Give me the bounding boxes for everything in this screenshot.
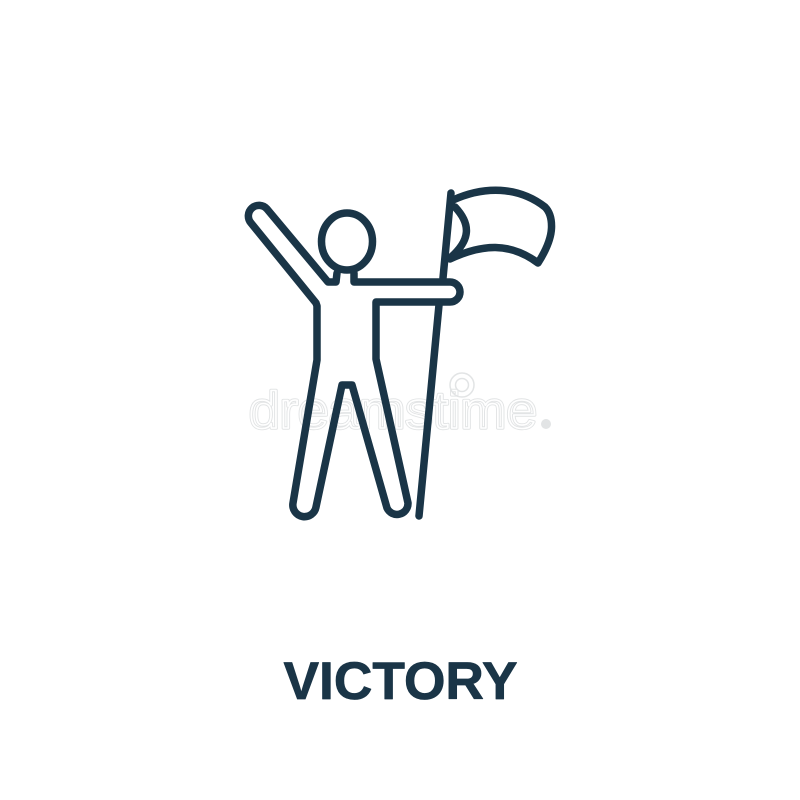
watermark: dreamstime [249, 382, 537, 440]
watermark: dreamstime [249, 382, 537, 440]
icon: body outline [248, 205, 460, 517]
icon: flag [450, 190, 552, 263]
icon: flag pole [419, 193, 451, 516]
icon: person raising arm holding flag [248, 190, 552, 517]
title: VICTORY [284, 652, 518, 711]
icon: head [322, 213, 372, 270]
